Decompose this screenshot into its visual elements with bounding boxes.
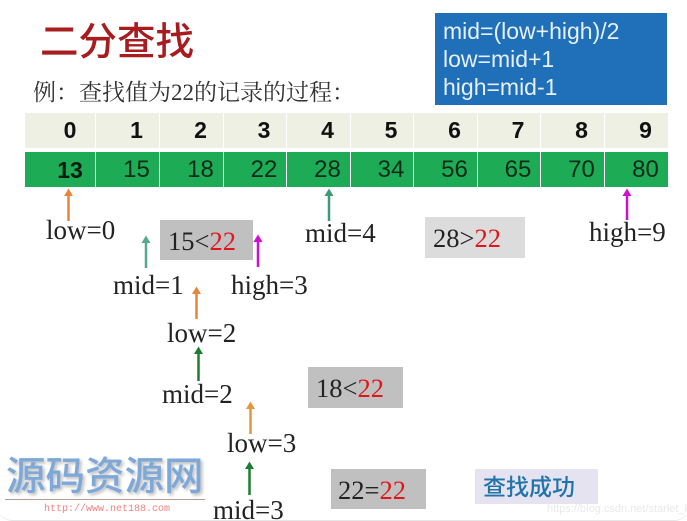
label: high=3: high=3 xyxy=(231,270,308,300)
array index row xyxy=(25,113,668,148)
result: search success: 查找成功 xyxy=(483,474,575,500)
label: mid=4: mid=4 xyxy=(305,218,376,248)
formula box: high=mid-1 xyxy=(443,74,557,100)
label: mid=2: mid=2 xyxy=(162,379,233,409)
comparison: 28>22 xyxy=(425,217,525,258)
array index row: 4 xyxy=(321,117,334,143)
comparison: 15<22: 15<22 xyxy=(168,226,236,256)
label: low=0: low=0 xyxy=(46,215,115,245)
comparison: 15<22 xyxy=(160,220,253,260)
arrow: high=3 xyxy=(254,234,262,267)
array value row: 80 xyxy=(632,156,659,183)
watermark: source site logo: 源码资源网 xyxy=(6,455,204,499)
watermark: source site logo: http://www.net188.com xyxy=(44,504,170,515)
array value row: 56 xyxy=(441,156,468,183)
label: low=2: low=2 xyxy=(167,318,236,348)
label: low=3: low=3 xyxy=(227,428,296,458)
array index row: 9 xyxy=(639,117,652,143)
array index row: 7 xyxy=(512,117,524,143)
result: search success xyxy=(475,469,598,504)
array value row: 28 xyxy=(314,156,341,183)
label: mid=1: mid=1 xyxy=(113,270,184,300)
array index row: 1 xyxy=(130,117,143,143)
arrow: low=2 xyxy=(192,286,201,319)
array index row: 0 xyxy=(64,117,76,143)
array index row: 2 xyxy=(194,117,207,143)
array index row: 6 xyxy=(448,117,461,143)
comparison: 18<22 xyxy=(308,367,403,408)
array value row: 65 xyxy=(505,156,531,183)
array index row: 3 xyxy=(258,117,270,143)
arrow: high=9 xyxy=(622,188,632,220)
array value row: 70 xyxy=(568,156,595,183)
arrow: mid=1 xyxy=(142,236,150,268)
arrow: mid=3 xyxy=(245,462,254,495)
arrow: low=0 xyxy=(64,188,73,221)
comparison: 18<22: 18<22 xyxy=(316,373,384,403)
label: high=9: high=9 xyxy=(589,217,666,247)
subtitle: example description: 例：查找值为22的记录的过程： xyxy=(33,80,355,105)
arrow: mid=4 xyxy=(324,188,334,221)
array value row: 18 xyxy=(187,156,214,183)
comparison: 22=22 xyxy=(331,469,426,509)
comparison: 28>22: 28>22 xyxy=(433,223,501,253)
comparison: 22=22: 22=22 xyxy=(338,475,406,505)
array index row: 8 xyxy=(575,117,588,143)
array value row: 13 xyxy=(57,157,83,183)
title: 二分查找 xyxy=(40,21,194,64)
formula box xyxy=(435,13,667,105)
formula box: low=mid+1 xyxy=(443,46,554,72)
formula box: mid=(low+high)/2 xyxy=(443,18,619,44)
arrow: low=3 xyxy=(246,402,255,434)
array value row: 34 xyxy=(378,156,404,183)
array index row: 5 xyxy=(385,117,397,143)
arrow: mid=2 xyxy=(194,346,203,381)
array value row: 22 xyxy=(251,156,277,183)
array value row: 15 xyxy=(123,156,150,183)
array value row xyxy=(25,152,668,187)
